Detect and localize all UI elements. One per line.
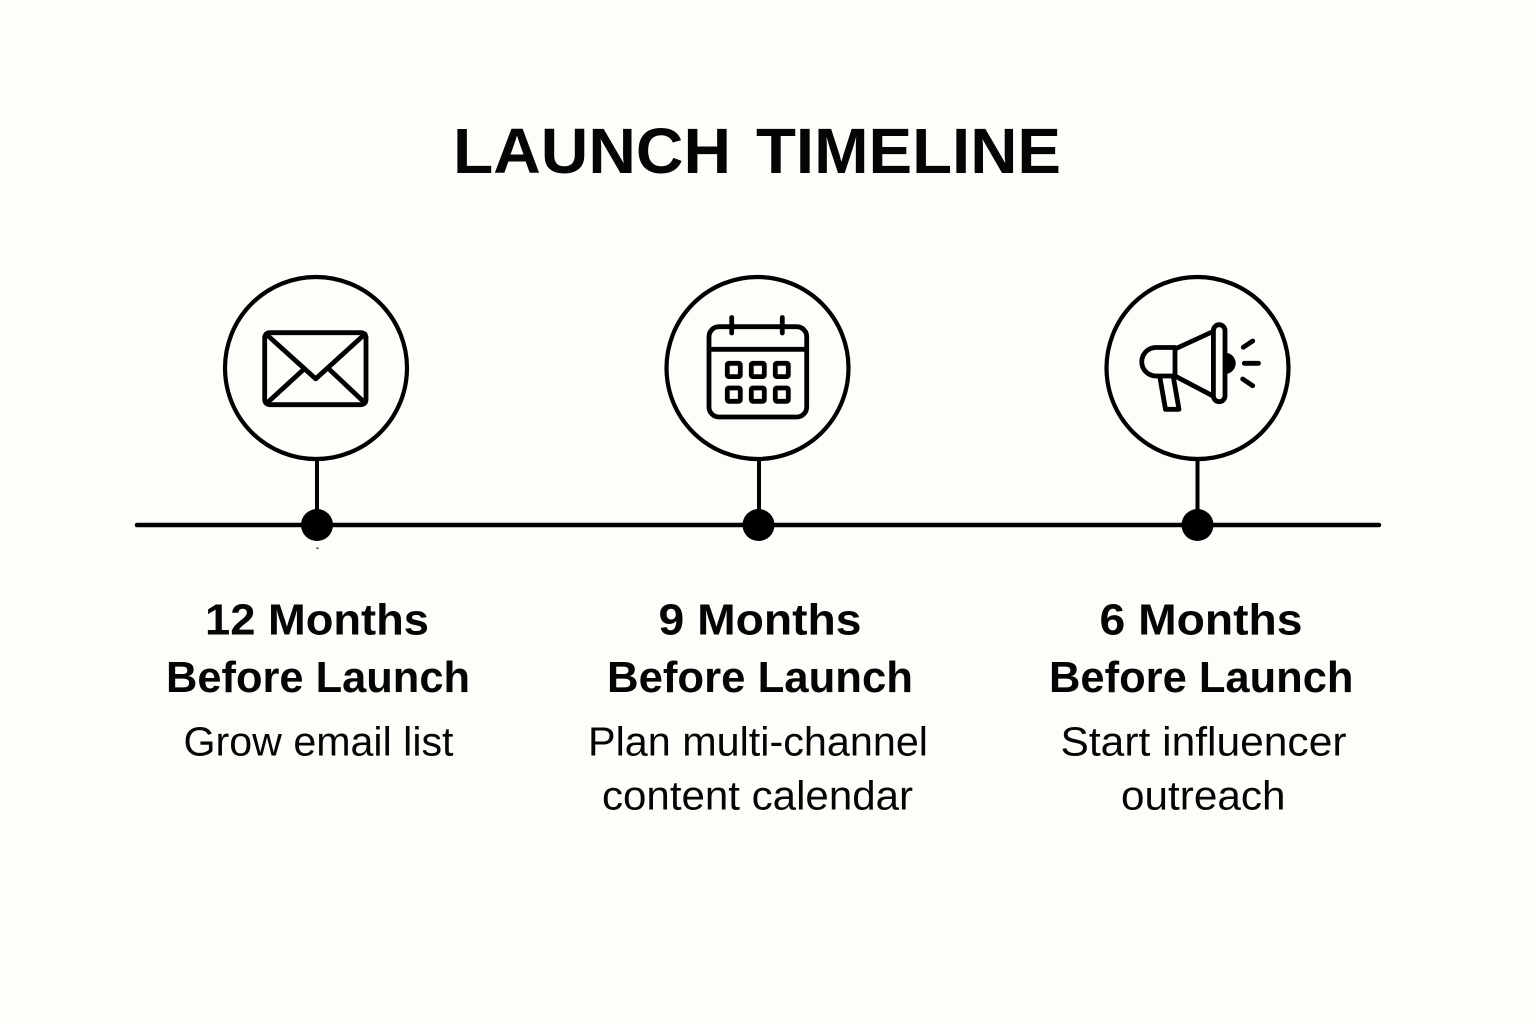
description [1060, 718, 1346, 818]
timeline marker [742, 509, 774, 541]
icon circle: calendar [666, 277, 848, 459]
description: content calendar [602, 772, 913, 818]
description: Plan multi-channel [588, 718, 928, 764]
timeline axis [137, 523, 1379, 527]
label: 6 months [1049, 596, 1354, 818]
milestone: 12 months [225, 277, 407, 549]
timeline marker [301, 509, 333, 541]
heading: 12 Months [205, 596, 429, 644]
icon circle: email [225, 277, 407, 459]
megaphone speaker dot [1226, 353, 1236, 374]
heading: Before Launch [607, 654, 913, 702]
title: LAUNCH [453, 115, 731, 187]
heading [166, 596, 470, 702]
label: 9 months [588, 596, 928, 818]
description [588, 718, 928, 818]
heading: Before Launch [166, 654, 470, 702]
icon circle: megaphone [1106, 277, 1288, 459]
heading [607, 596, 913, 702]
heading: 9 Months [658, 596, 862, 644]
description: Grow email list [184, 718, 454, 764]
description: outreach [1121, 772, 1286, 818]
megaphone body [1142, 325, 1258, 409]
connector stem [315, 460, 319, 515]
milestone: 6 months [1106, 277, 1288, 541]
label: 12 months [166, 596, 470, 764]
connector stem [757, 460, 761, 515]
heading: 6 Months [1100, 596, 1302, 644]
title [453, 115, 1061, 187]
heading [1049, 596, 1354, 702]
connector stem [1196, 460, 1200, 515]
icon: calendar [709, 318, 807, 417]
icon: megaphone [1142, 325, 1258, 409]
timeline marker [1182, 509, 1214, 541]
small speck [316, 548, 318, 549]
description: Start influencer [1060, 718, 1346, 764]
icon: envelope [265, 333, 366, 405]
heading: Before Launch [1049, 654, 1354, 702]
milestone: 9 months [666, 277, 848, 541]
title: TIMELINE [756, 115, 1061, 187]
